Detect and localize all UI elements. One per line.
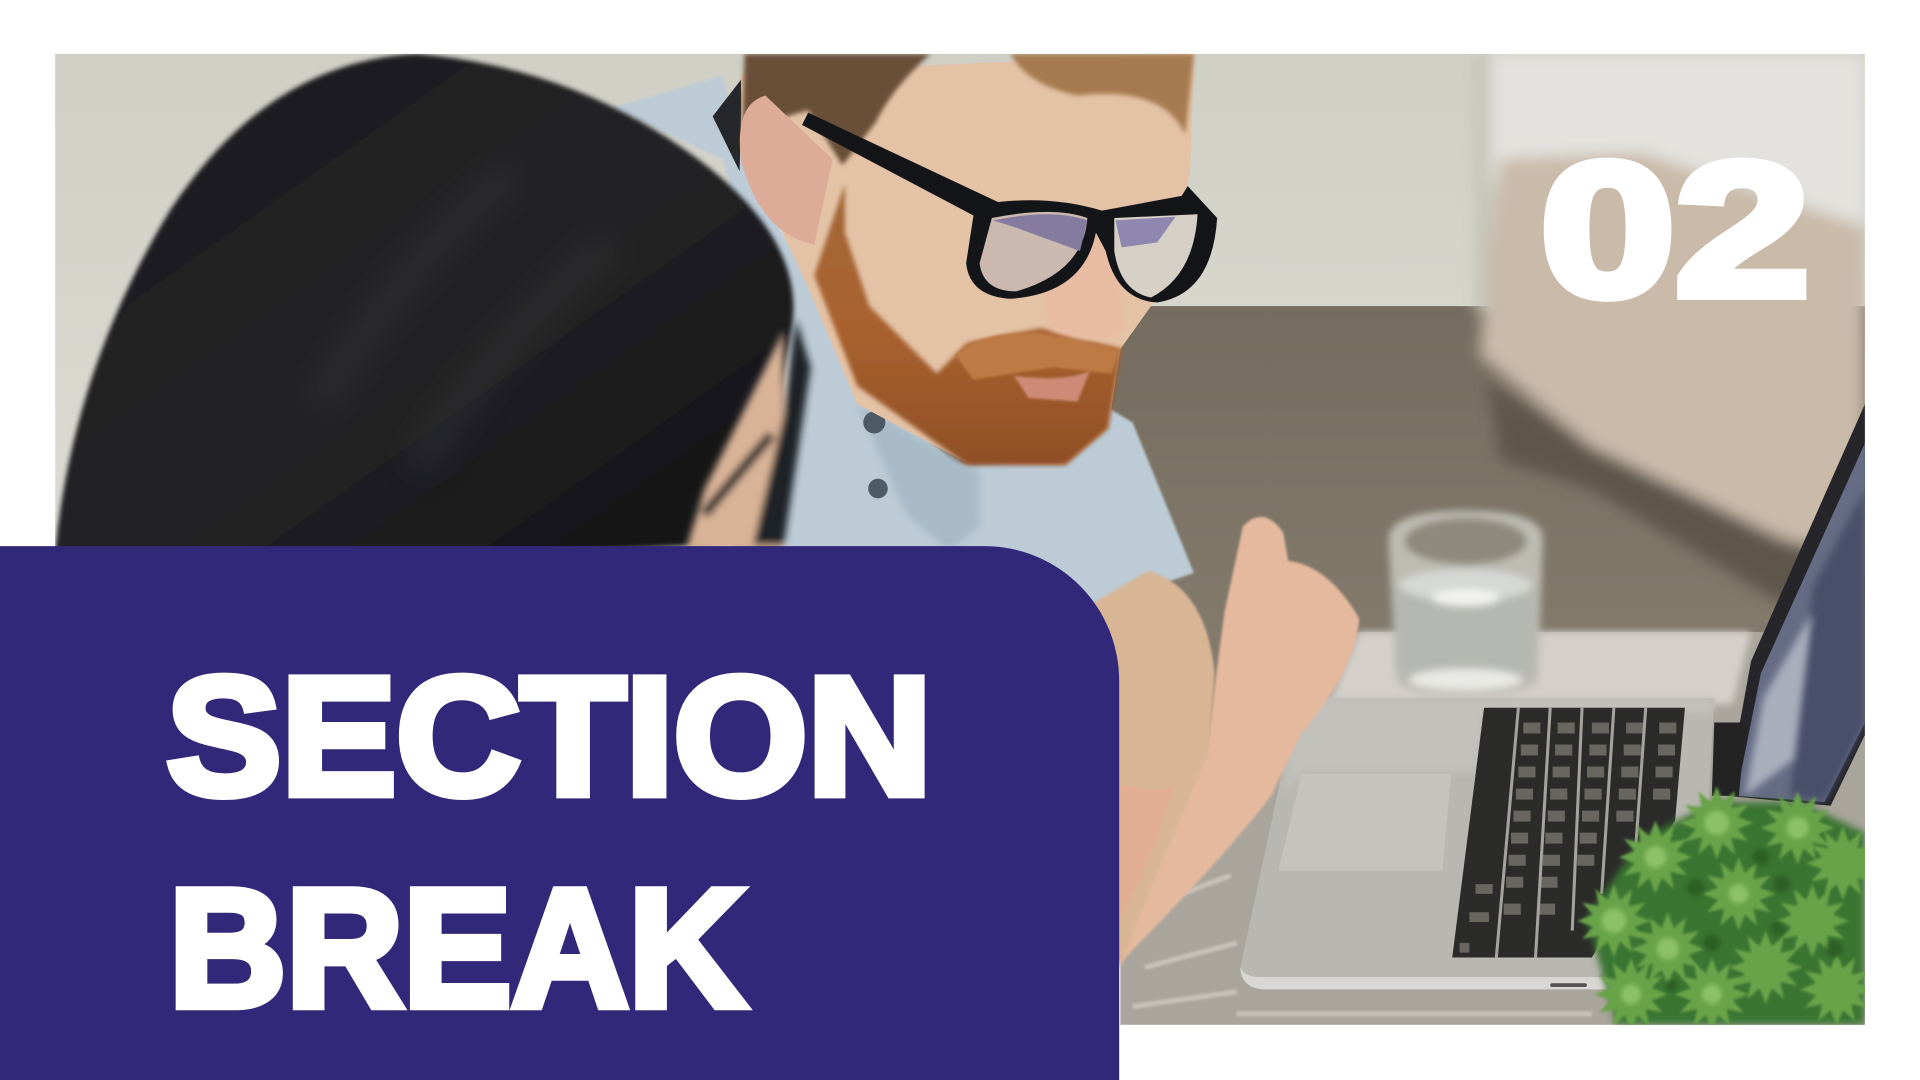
man: head [740, 54, 1215, 465]
hair [742, 54, 931, 165]
ear [740, 96, 833, 245]
title line two: BREAK [169, 854, 746, 1042]
beard [814, 184, 1122, 465]
laptop screen [1727, 404, 1865, 806]
glasses [802, 113, 1217, 302]
keyboard [1452, 708, 1685, 958]
wall [55, 54, 1865, 546]
panel: section title [0, 546, 1119, 1080]
plant [1577, 786, 1880, 1031]
table [1120, 632, 1865, 1025]
man: shirt [616, 76, 1195, 604]
hinge [1712, 722, 1742, 796]
mouth [1014, 371, 1090, 402]
trackpad [1278, 774, 1451, 871]
nose [1050, 328, 1096, 342]
laptop base [1240, 698, 1714, 987]
woman: face [686, 318, 811, 551]
title line one: SECTION [167, 642, 932, 830]
man: arm and fist [1078, 517, 1359, 967]
woman: hair [55, 54, 794, 576]
bed [1476, 54, 1865, 612]
floor [735, 306, 1865, 882]
keyboard keys [1460, 722, 1676, 953]
table grain [1133, 876, 1592, 1014]
water glass [1389, 511, 1543, 696]
keyboard column gaps [1496, 708, 1646, 958]
section number: 02 [1540, 124, 1810, 336]
